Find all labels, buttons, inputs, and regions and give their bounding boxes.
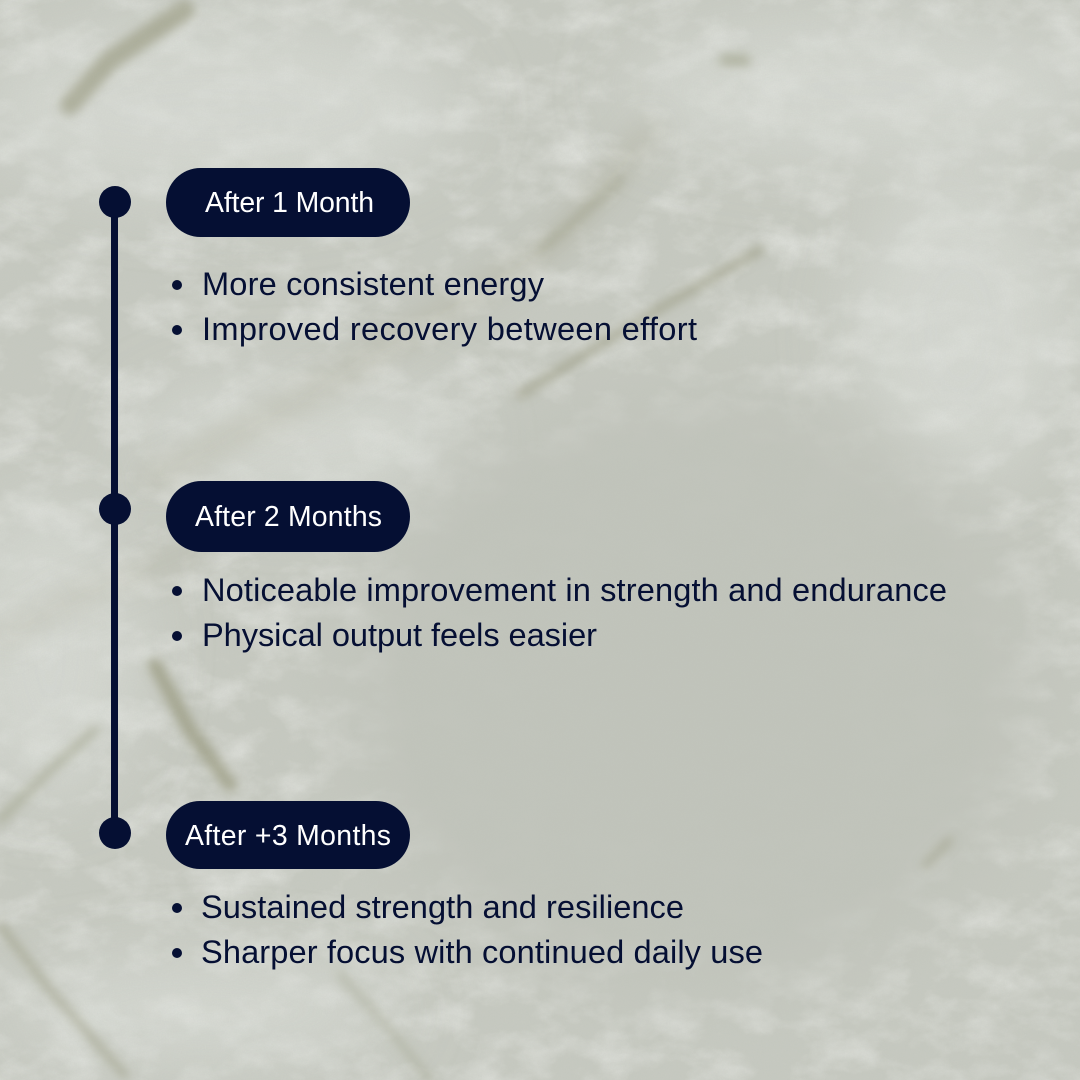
list: after 2 months benefits: Physical output feels easier bbox=[202, 616, 597, 653]
pill: after 2 months bbox=[166, 481, 410, 552]
pill: after 1 month: After 1 Month bbox=[205, 187, 374, 219]
list: after 1 month benefits: More consistent energy bbox=[202, 265, 545, 302]
list: after +3 months benefits bbox=[172, 888, 763, 970]
timeline: vertical line with three dots bbox=[99, 186, 131, 849]
list: after 2 months benefits bbox=[172, 571, 947, 653]
section: after 2 months bbox=[166, 481, 947, 653]
pill: after 2 months: After 2 Months bbox=[195, 501, 382, 533]
list: after +3 months benefits: Sustained strength and resilience bbox=[201, 888, 684, 925]
list: after 2 months benefits: Noticeable improvement in strength and endurance bbox=[202, 571, 947, 608]
list: after 1 month benefits bbox=[172, 265, 697, 347]
list: after +3 months benefits: Sharper focus with continued daily use bbox=[201, 933, 763, 970]
pill: after +3 months bbox=[166, 801, 410, 869]
pill: after 1 month bbox=[166, 168, 410, 237]
section: after +3 months bbox=[166, 801, 763, 970]
pill: after +3 months: After +3 Months bbox=[185, 820, 391, 852]
list: after 1 month benefits: Improved recovery between effort bbox=[202, 310, 697, 347]
section: after 1 month bbox=[166, 168, 697, 347]
